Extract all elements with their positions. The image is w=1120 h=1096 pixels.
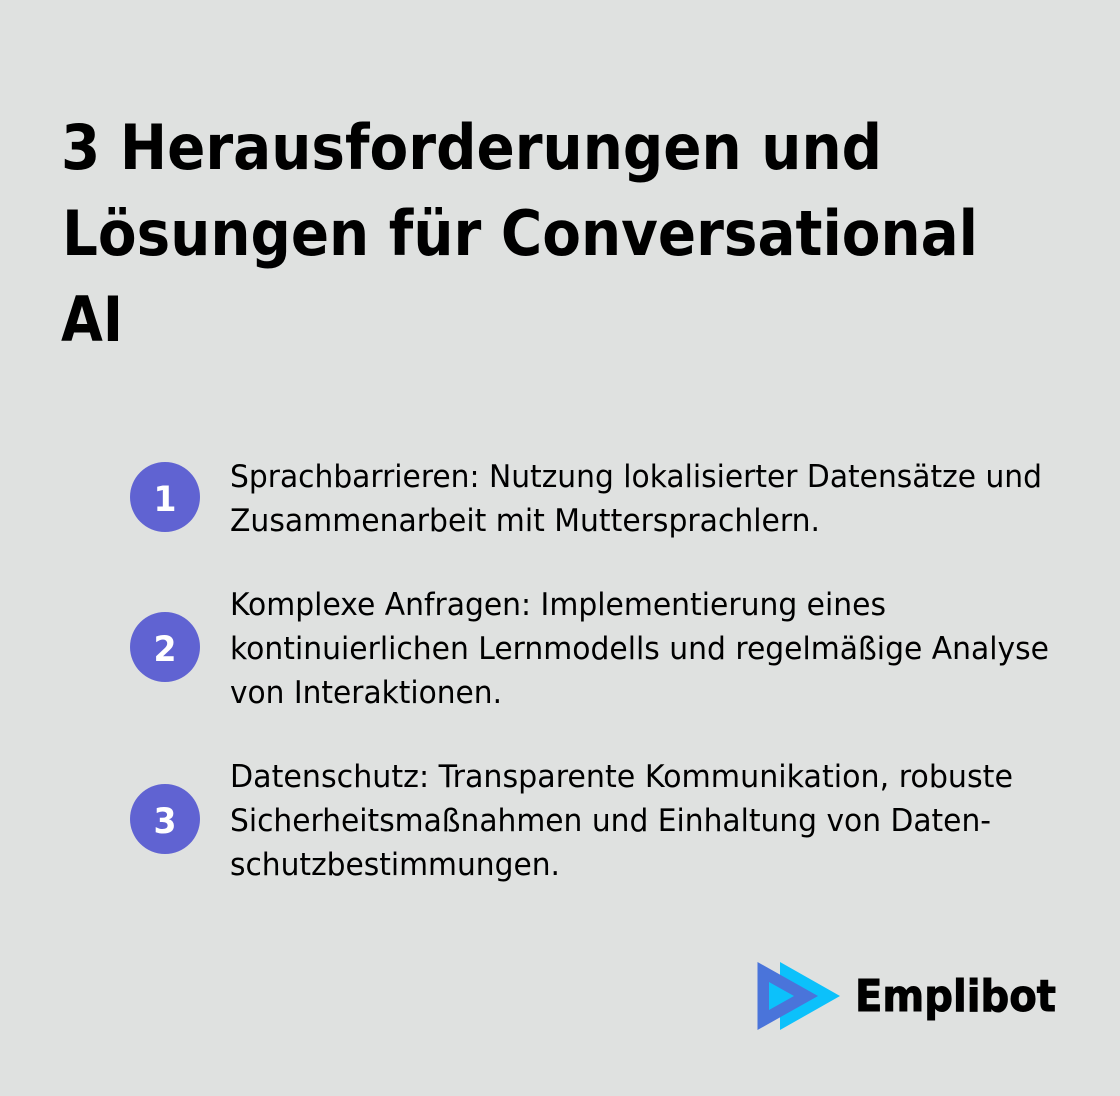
item 3 text: schutzbestimmungen.	[230, 847, 560, 883]
wordmark: Emplibot	[855, 971, 1056, 1022]
title	[61, 111, 978, 356]
item 2 text: von Interaktionen.	[230, 675, 502, 711]
title: 3 Herausforderungen und	[61, 111, 882, 184]
item 2 text: Komplexe Anfragen: Implementierung eines	[230, 587, 886, 623]
icon: play triangles	[758, 962, 840, 1030]
item 3 text: Sicherheitsmaßnahmen und Einhaltung von Daten-	[230, 803, 991, 839]
number badge 1	[130, 462, 200, 532]
item 1 text	[230, 459, 1042, 539]
item 2 text	[230, 587, 1049, 711]
item 2	[130, 587, 1049, 711]
number badge 3: 3	[154, 802, 176, 842]
item 1	[130, 459, 1042, 539]
number badge 2: 2	[154, 630, 176, 670]
item 1 text: Sprachbarrieren: Nutzung lokalisierter Datensätze und	[230, 459, 1042, 495]
item 3 text: Datenschutz: Transparente Kommunikation, robuste	[230, 759, 1013, 795]
item 3 text	[230, 759, 1013, 883]
number badge 1: 1	[154, 480, 176, 520]
item 2 text: kontinuierlichen Lernmodells und regelmäßige Analyse	[230, 631, 1049, 667]
title: Lösungen für Conversational	[62, 197, 978, 270]
item 1 text: Zusammenarbeit mit Muttersprachlern.	[230, 503, 820, 539]
title: AI	[61, 283, 123, 356]
item 3	[130, 759, 1013, 883]
logo: Emplibot	[758, 962, 1056, 1030]
number badge 3	[130, 784, 200, 854]
number badge 2	[130, 612, 200, 682]
